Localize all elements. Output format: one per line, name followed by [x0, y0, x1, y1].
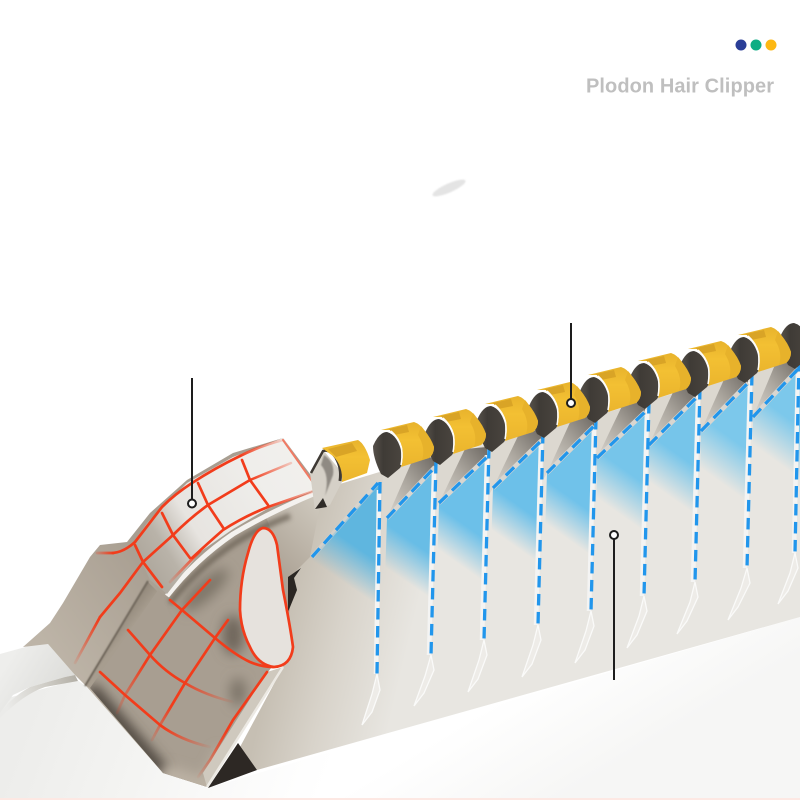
callout: blade teeth: [610, 531, 618, 680]
centre line extension: [100, 562, 143, 617]
beige faces above tooth diagonals: [382, 358, 799, 524]
blue cooling panels: [312, 365, 800, 700]
dark collar blocks: [373, 323, 800, 478]
band centre line: [143, 480, 250, 562]
taupe bracket shape: [23, 438, 322, 787]
brand title: Plodon Hair Clipper: [586, 76, 774, 98]
blade body: [240, 345, 800, 770]
lip shadow: [170, 516, 290, 603]
clipper illustration: [0, 323, 800, 800]
diagonal tooth edges: [312, 368, 799, 557]
white tooth edges: [376, 368, 798, 674]
blue dashed tooth outlines: [312, 360, 799, 674]
red contour grid: [75, 440, 317, 777]
white clipper housing: [0, 617, 800, 800]
dark gap under blade: [208, 743, 257, 788]
block grid lines: [117, 580, 210, 713]
callout: grip band: [188, 378, 196, 508]
faint background smudge: [431, 177, 467, 199]
central block: [90, 590, 268, 787]
left bracket: [23, 438, 322, 787]
neck: [265, 490, 322, 600]
callout: gold collar: [567, 323, 575, 407]
white grip pill: [240, 528, 293, 667]
brand colour dots: [736, 40, 776, 50]
dark notch: [288, 568, 301, 612]
groove shadow line: [85, 581, 148, 686]
groove strip: [85, 582, 158, 688]
block shading: [90, 563, 246, 787]
grey tooth wedges: [387, 358, 799, 518]
tooth tips: [362, 553, 798, 725]
gold tooth collars: [381, 327, 791, 467]
band cross lines: [135, 545, 162, 587]
first metal clip: [310, 440, 370, 510]
band edges: [113, 542, 135, 553]
lower right strip: [203, 667, 283, 787]
curved white band: [133, 438, 318, 594]
band lip: [167, 492, 318, 596]
